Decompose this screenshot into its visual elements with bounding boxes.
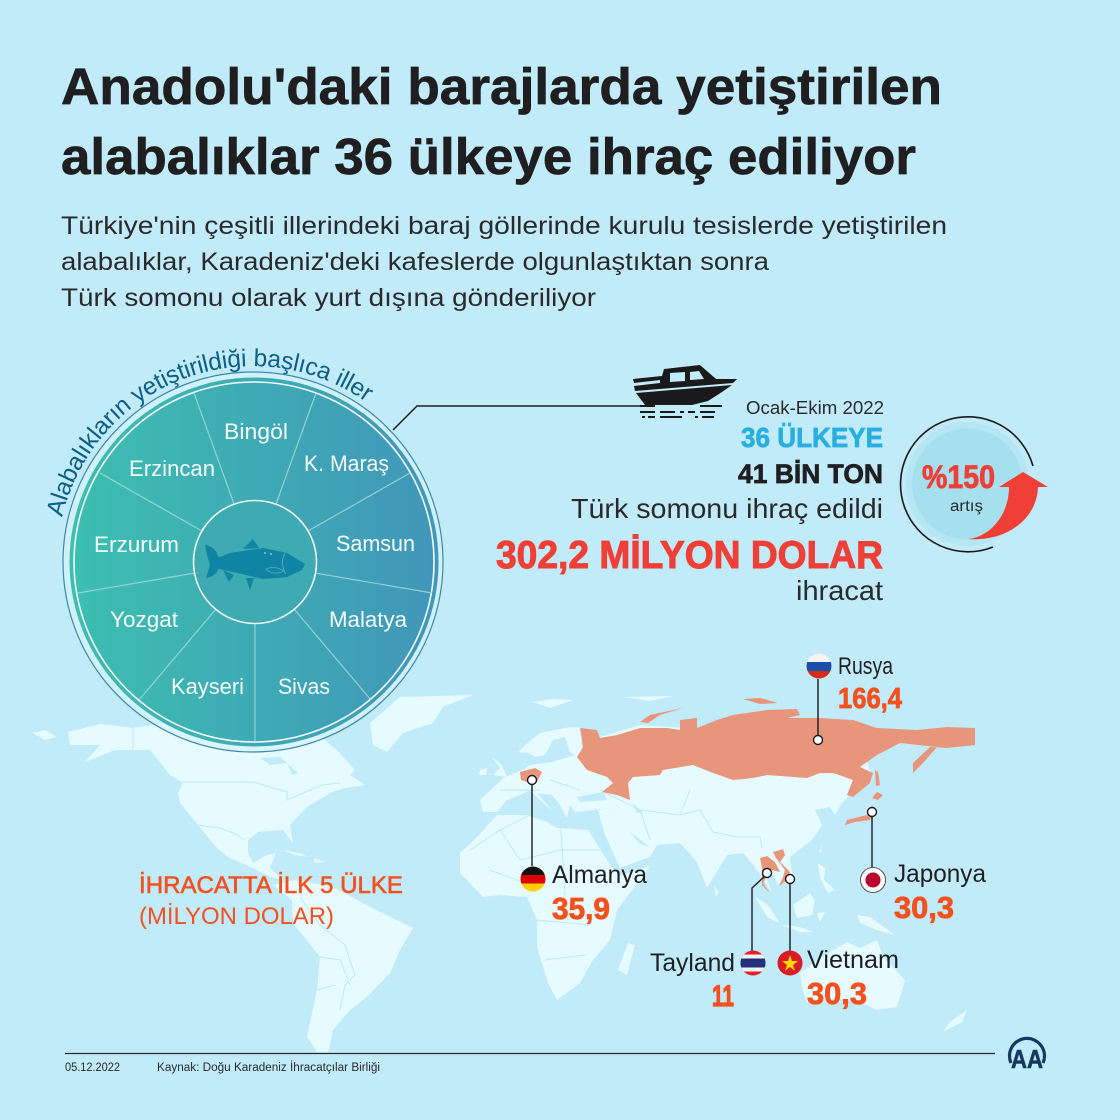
marker: Almanya: 35,9 [552,891,610,926]
province labels: Sivas [278,674,330,699]
marker: Tayland: 11 [712,980,734,1013]
icon: red arrow [968,472,1048,539]
vietnam [773,849,790,886]
marker: Rusya: Rusya [838,653,894,680]
inland water [260,757,650,847]
marker: Tayland [650,868,772,1013]
province labels: Samsun [336,531,415,556]
map heading: İHRACATTA İLK 5 ÜLKE [139,872,403,899]
icon: boat [633,365,737,418]
export stats: 41 BİN TON [738,459,883,489]
icon: fish [205,539,305,590]
percent value: %150 [922,459,995,495]
marker: Almanya [520,776,647,926]
marker: Rusya: 166,4 [838,683,902,715]
australia [800,940,905,1010]
intro text: Türkiye'nin çeşitli illerindeki baraj göllerinde kurulu tesislerde yetiştirilen [61,212,947,240]
south america [273,880,413,1052]
increase badge [901,417,1048,552]
connector line [393,406,640,430]
hub circle [194,500,316,624]
title [61,58,942,185]
world map [32,695,975,1052]
thailand [760,856,780,893]
export stats [496,397,884,606]
south-east asia islands [755,897,780,923]
africa [460,815,650,1000]
intro text: alabalıklar, Karadeniz'deki kafeslerde olgunlaştıktan sonra [61,248,769,276]
export stats: 36 ÜLKEYE [741,422,883,453]
title: alabalıklar 36 ülkeye ihraç ediliyor [61,128,916,185]
province labels: K. Maraş [304,451,389,476]
export stats: Ocak-Ekim 2022 [746,397,884,418]
eurasia [480,725,872,893]
highlighted countries [520,698,975,893]
map heading: (MİLYON DOLAR) [139,903,334,930]
footer: Kaynak: Doğu Karadeniz İhracatçılar Birliği [157,1061,380,1074]
footer [65,1054,995,1074]
province labels: Bingöl [224,419,288,444]
map heading [139,872,403,930]
intro text [61,212,947,312]
japan [845,805,875,825]
germany [520,768,542,782]
marker: Japonya: Japonya [894,860,986,888]
marker: Japonya: 30,3 [894,890,954,925]
russia [577,709,975,800]
export stats: ihracat [796,575,883,606]
export stats: 302,2 MİLYON DOLAR [496,534,883,577]
export stats: Türk somonu ihraç edildi [571,493,883,524]
scandinavia [518,727,582,760]
province labels [94,419,415,699]
marker: Vietnam: 30,3 [807,976,867,1011]
country borders [133,728,762,1010]
province labels: Yozgat [110,607,178,632]
curved heading: Alabalıkların yetiştirildiği başlıca iller [48,348,374,518]
province labels: Malatya [329,607,408,632]
marker: Vietnam [778,874,899,1011]
province labels: Kayseri [171,674,244,699]
percent caption: artış [950,498,983,515]
marker: Japonya [860,808,986,925]
title: Anadolu'daki barajlarda yetiştirilen [61,58,942,115]
wheel of provinces [63,372,443,752]
marker: Vietnam: Vietnam [807,946,899,974]
marker: Almanya: Almanya [552,861,647,889]
footer: 05.12.2022 [65,1062,120,1074]
marker: Tayland: Tayland [650,949,735,977]
marker: Rusya [805,653,902,744]
north america [68,720,365,888]
province labels: Erzincan [129,456,215,481]
intro text: Türk somonu olarak yurt dışına gönderiliyor [61,284,596,312]
province labels: Erzurum [94,532,179,557]
logo: AA: AA [1011,1044,1043,1074]
